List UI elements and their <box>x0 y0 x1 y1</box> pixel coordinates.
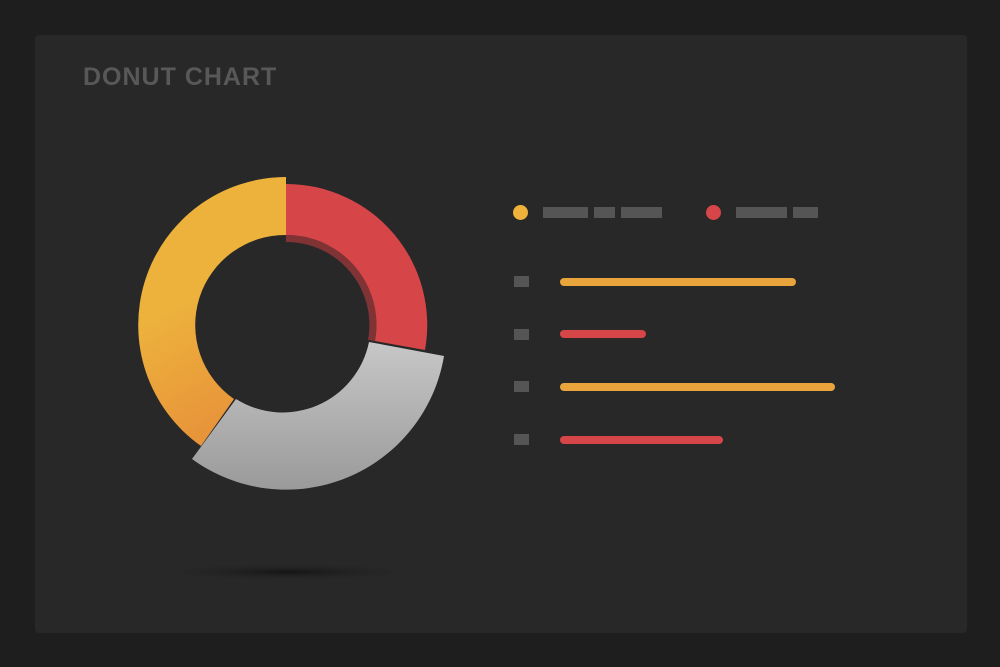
segment: red <box>286 184 427 350</box>
segment: yellow <box>138 177 286 446</box>
shadow <box>148 563 428 581</box>
title: DONUT CHART <box>83 63 277 91</box>
bar list <box>514 276 835 445</box>
legend <box>513 205 818 220</box>
segment: gray <box>192 342 444 490</box>
